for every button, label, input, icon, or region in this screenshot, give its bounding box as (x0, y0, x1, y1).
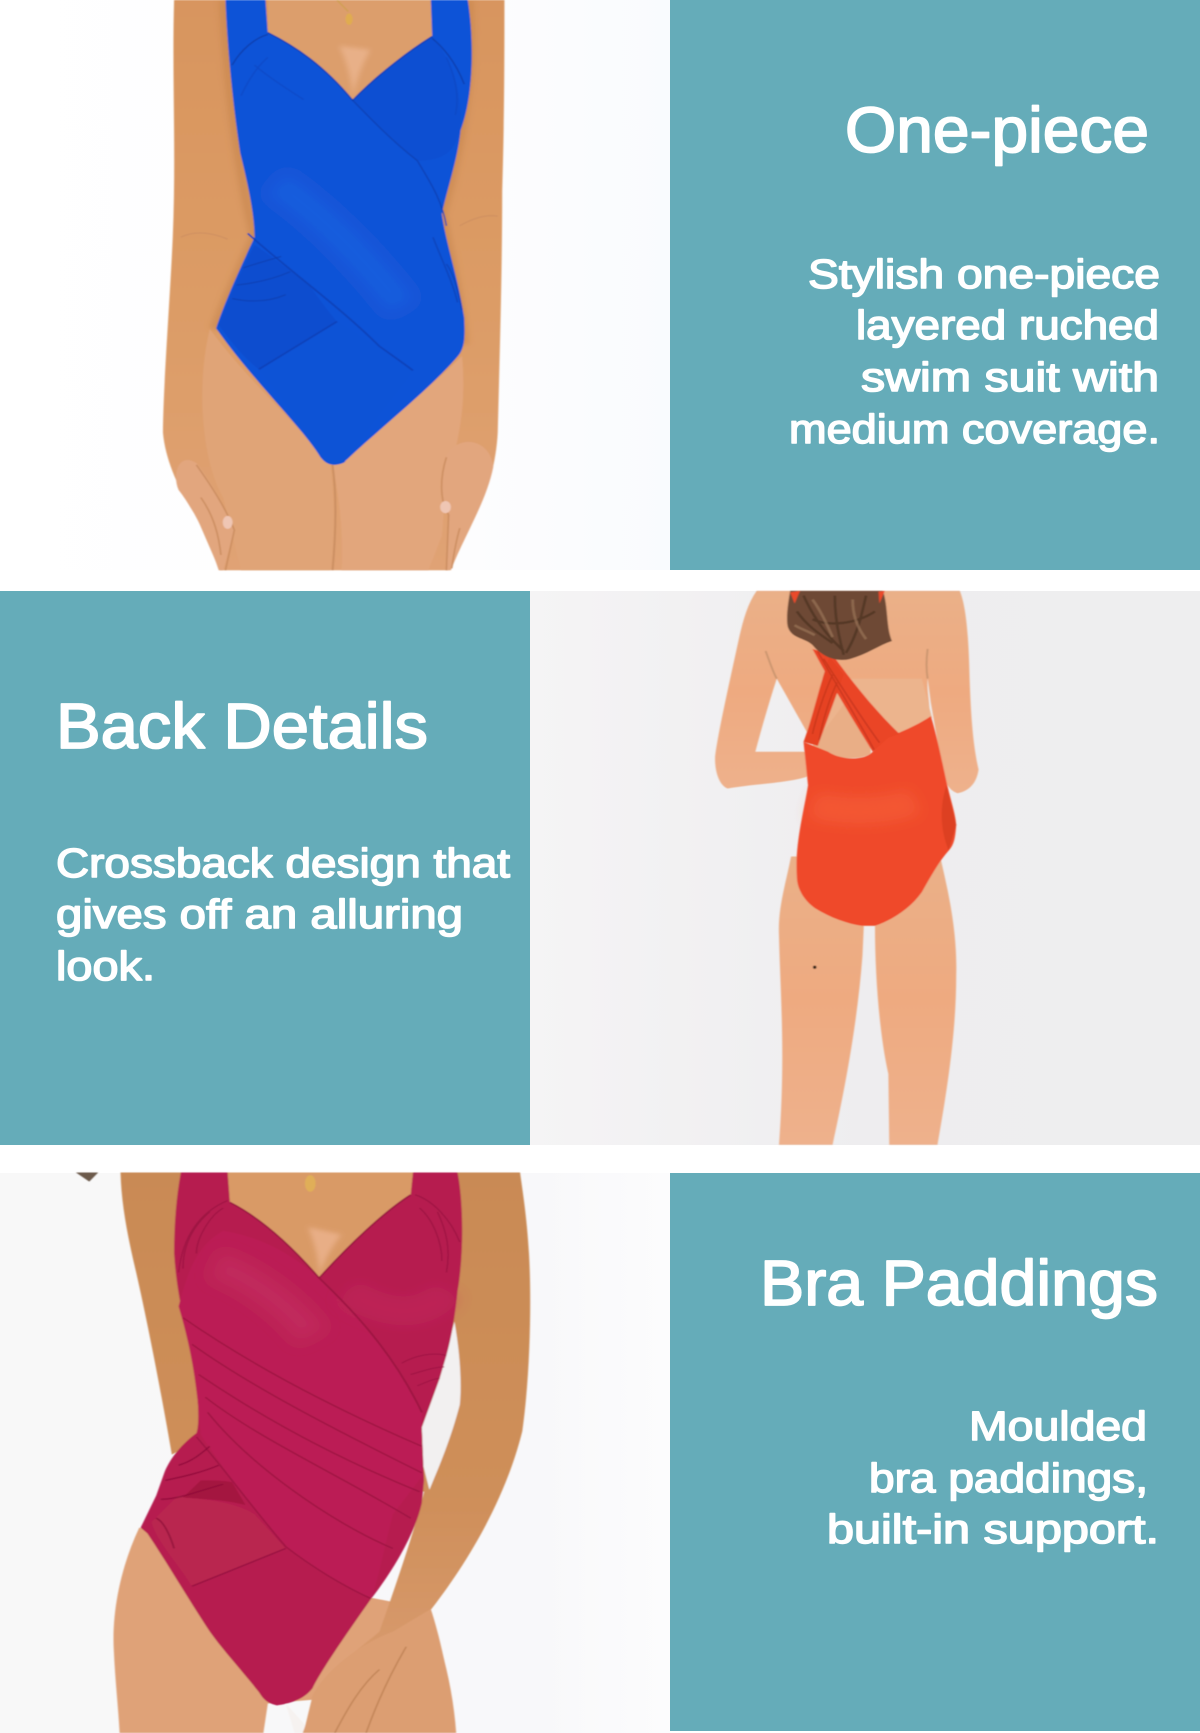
figure: blue swimsuit model (163, 0, 504, 570)
icon: necklace (337, 0, 353, 25)
heading: Back Details: Back Details (56, 690, 428, 762)
legs (779, 855, 956, 1145)
text block: bra paddings description (827, 1403, 1159, 1552)
text block: one-piece description: swim suit with (861, 354, 1159, 400)
text block: bra paddings description: bra paddings, (869, 1455, 1148, 1501)
panel: bra paddings photo (0, 1173, 670, 1733)
panel: back details text (0, 591, 530, 1145)
figure: orange swimsuit back view (715, 591, 979, 1145)
text block: back details description: Crossback design that (56, 840, 511, 886)
hand (304, 1609, 455, 1733)
torso, arms (121, 1173, 530, 1733)
text block: one-piece description (789, 251, 1160, 452)
figure: burgundy swimsuit model (76, 1173, 530, 1733)
text block: back details description: look. (56, 943, 155, 989)
text block: back details description: gives off an alluring (56, 891, 463, 937)
heading: Bra Paddings: Bra Paddings (760, 1247, 1158, 1319)
moles (813, 966, 816, 969)
thighs (113, 1528, 456, 1733)
suit (141, 1173, 462, 1705)
panel: bra paddings text (670, 1173, 1200, 1731)
panel: one-piece text (670, 0, 1200, 570)
text block: bra paddings description: built-in support. (827, 1506, 1159, 1552)
text block: back details description (56, 840, 511, 989)
top wrap band (179, 1231, 422, 1598)
text block: one-piece description: layered ruched (856, 302, 1159, 348)
necklace (305, 1175, 316, 1192)
heading: One-piece: One-piece (845, 94, 1149, 166)
back and arms (715, 591, 979, 793)
hair (787, 591, 892, 660)
panel: back details photo (530, 591, 1200, 1145)
text block: bra paddings description: Moulded (969, 1403, 1147, 1449)
straps (812, 649, 900, 752)
suit body (797, 716, 956, 926)
panel: one-piece photo (0, 0, 670, 570)
text block: one-piece description: medium coverage. (789, 406, 1160, 452)
text block: one-piece description: Stylish one-piece (808, 251, 1160, 297)
